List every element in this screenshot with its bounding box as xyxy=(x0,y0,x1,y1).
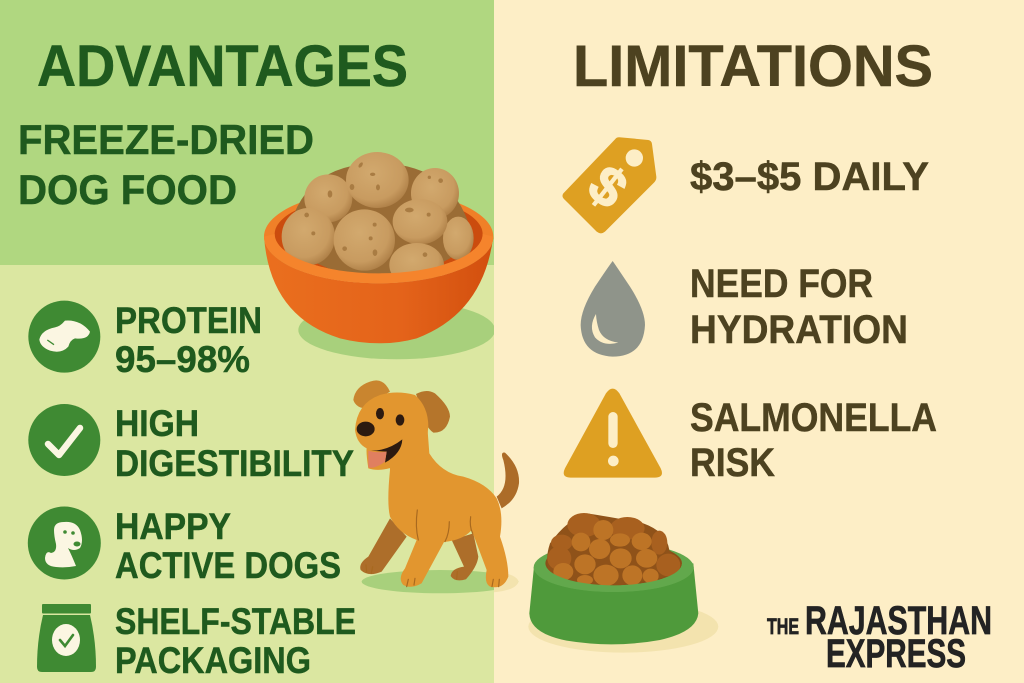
item: hydration xyxy=(581,261,908,357)
icon: check xyxy=(28,404,100,476)
label: happy active dogs xyxy=(115,506,341,586)
label: shelf-stable packaging: SHELF-STABLE xyxy=(115,601,356,642)
icon: price tag xyxy=(562,137,656,233)
label: daily cost: $3–$5 DAILY xyxy=(690,155,929,199)
panel background: cream xyxy=(494,0,1024,683)
dog ground shadow xyxy=(362,570,518,593)
dog tail xyxy=(497,453,519,508)
logo: the rajasthan express xyxy=(767,599,992,676)
item: protein xyxy=(28,300,262,380)
subheading: freeze-dried dog food: FREEZE-DRIED xyxy=(18,116,314,163)
icon: price tag: $ xyxy=(577,153,639,220)
icon: dog xyxy=(28,506,101,580)
icon: warning triangle xyxy=(564,389,662,478)
dog fur and toe lines xyxy=(366,510,499,587)
label: protein 95-98%: PROTEIN xyxy=(115,300,262,341)
illustration: happy dog xyxy=(353,380,519,593)
label: high digestibility xyxy=(115,403,354,484)
item: salmonella xyxy=(564,389,937,485)
panel: limitations xyxy=(494,0,1024,683)
subheading: freeze-dried dog food xyxy=(18,116,314,213)
label: shelf-stable packaging: PACKAGING xyxy=(115,640,311,681)
item: happy dogs xyxy=(28,506,341,586)
label: high digestibility: DIGESTIBILITY xyxy=(115,443,354,484)
logo: the rajasthan express: THE xyxy=(767,614,799,639)
label: need for hydration xyxy=(690,262,908,352)
dog face xyxy=(357,408,404,468)
label: need for hydration: HYDRATION xyxy=(690,308,908,352)
label: protein 95-98% xyxy=(115,300,262,380)
subheading: freeze-dried dog food: DOG FOOD xyxy=(18,166,237,213)
label: salmonella risk: RISK xyxy=(690,441,775,485)
label: happy active dogs: ACTIVE DOGS xyxy=(115,545,341,586)
label: need for hydration: NEED FOR xyxy=(690,262,873,306)
icon: food bag xyxy=(37,604,96,672)
heading: advantages: ADVANTAGES xyxy=(37,34,408,99)
item: digestibility xyxy=(28,403,354,484)
label: protein 95-98%: 95–98% xyxy=(115,339,250,380)
label: happy active dogs: HAPPY xyxy=(115,506,231,547)
item: packaging xyxy=(37,601,356,681)
label: high digestibility: HIGH xyxy=(115,403,199,444)
illustration: green bowl of kibble xyxy=(528,513,718,653)
dog body xyxy=(388,427,508,587)
dog back legs xyxy=(360,518,478,580)
icon: water drop xyxy=(581,261,645,357)
heading: limitations: LIMITATIONS xyxy=(573,34,933,99)
label: salmonella risk xyxy=(690,396,937,485)
item: cost xyxy=(562,137,929,233)
illustration: orange bowl of freeze-dried balls xyxy=(264,152,495,359)
dog ears xyxy=(353,380,450,433)
panel background: light green xyxy=(0,0,494,683)
panel: advantages xyxy=(0,0,494,683)
logo: the rajasthan express: EXPRESS xyxy=(826,632,966,676)
icon: protein xyxy=(28,301,100,373)
dog head xyxy=(355,392,428,470)
label: shelf-stable packaging xyxy=(115,601,356,681)
header background: mid green xyxy=(0,0,494,265)
label: salmonella risk: SALMONELLA xyxy=(690,396,937,440)
